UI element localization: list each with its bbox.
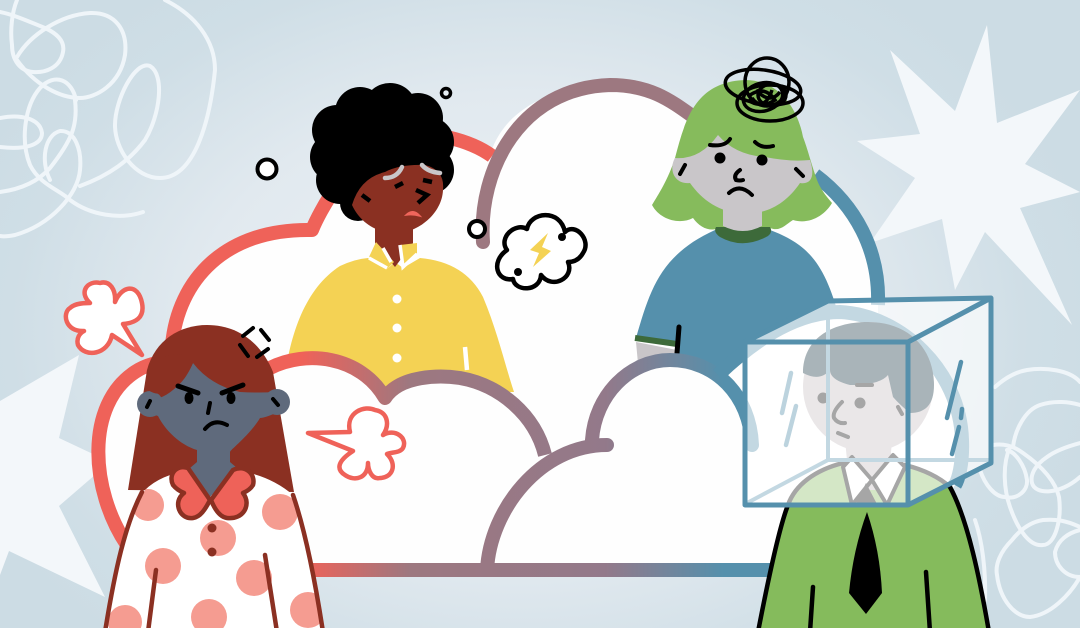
nose, mouth and ear marks — [147, 399, 278, 429]
icon: lightning bolt — [530, 233, 551, 267]
small black ring mid — [469, 221, 485, 237]
tie knot — [855, 483, 878, 506]
face — [352, 165, 443, 233]
back cloud fill — [98, 85, 878, 570]
person: tired woman in yellow — [283, 83, 514, 392]
sleeve cuff — [635, 338, 677, 344]
upper inner lobe — [592, 360, 752, 445]
tie — [849, 512, 882, 614]
star: left — [0, 355, 110, 597]
brows, nose, mouth and ears — [680, 139, 803, 195]
forearm — [636, 342, 677, 385]
star: right — [857, 25, 1080, 325]
face and neck — [150, 363, 278, 500]
front edges of box — [745, 298, 991, 505]
hair — [803, 322, 934, 413]
back cloud mauve outline — [483, 85, 695, 242]
hair — [128, 325, 294, 492]
collar — [843, 455, 905, 505]
eyes — [714, 152, 768, 166]
glass box around head — [745, 298, 992, 505]
hair lump — [146, 354, 193, 394]
eyes — [184, 392, 236, 404]
closed eyes, nose and ear — [362, 180, 432, 203]
eyebrow, nose, mouth and ear — [834, 385, 902, 437]
shirt buttons — [392, 294, 402, 362]
shirt — [283, 258, 514, 392]
blouse — [105, 470, 323, 628]
turtleneck — [715, 227, 771, 243]
buttons — [208, 524, 216, 556]
ears — [137, 389, 290, 417]
collar — [369, 242, 417, 269]
right collar flap — [400, 243, 417, 268]
lower inner lobe — [487, 445, 607, 570]
scribble: bottom right — [975, 369, 1080, 617]
neck — [723, 205, 762, 231]
sleeve line — [465, 347, 467, 370]
sleeve line — [677, 327, 679, 353]
face — [672, 135, 812, 213]
green hair — [652, 80, 832, 230]
angry speech bubble: upper left — [66, 282, 143, 355]
front cloud fill — [98, 312, 962, 570]
head — [803, 322, 933, 452]
person: man with head in glass box — [758, 322, 989, 628]
person: worried woman with green hair — [635, 58, 850, 440]
pale reflections — [782, 373, 796, 445]
translucent glass — [745, 298, 991, 505]
thought bubble with lightning — [497, 215, 586, 288]
back cloud red outline — [172, 134, 492, 345]
left collar flap — [369, 242, 394, 269]
angry speech bubble: right — [308, 408, 404, 478]
cloud baseline — [290, 563, 780, 577]
back edges of box — [747, 302, 992, 503]
afro hair — [310, 83, 454, 221]
teal shirt — [636, 230, 850, 440]
brows — [178, 385, 243, 393]
icon: anger mark — [240, 328, 269, 357]
mouth — [406, 212, 420, 216]
neck — [845, 440, 892, 490]
back cloud — [98, 85, 878, 570]
small black ring left — [258, 160, 276, 178]
polka dots — [108, 489, 326, 628]
scribble: top left — [0, 0, 215, 236]
green shirt — [758, 463, 989, 628]
white collar edges — [369, 245, 417, 268]
back cloud blue outline — [815, 175, 878, 305]
blouse outline and arm lines — [105, 492, 323, 628]
bubble knots — [514, 233, 566, 276]
blue reflections — [947, 362, 962, 454]
left and middle lobes — [98, 358, 545, 545]
neck — [375, 222, 413, 267]
icon: tangled scribble above head — [723, 58, 803, 121]
eyes — [818, 392, 866, 408]
small black ring top — [442, 88, 450, 98]
coral collar — [171, 467, 253, 518]
eyebrows — [385, 165, 440, 178]
front cloud — [98, 312, 962, 570]
arm lines — [810, 572, 930, 628]
person: angry woman — [105, 325, 326, 628]
bubble outline — [497, 215, 586, 288]
right lobe seen through box — [718, 312, 962, 485]
